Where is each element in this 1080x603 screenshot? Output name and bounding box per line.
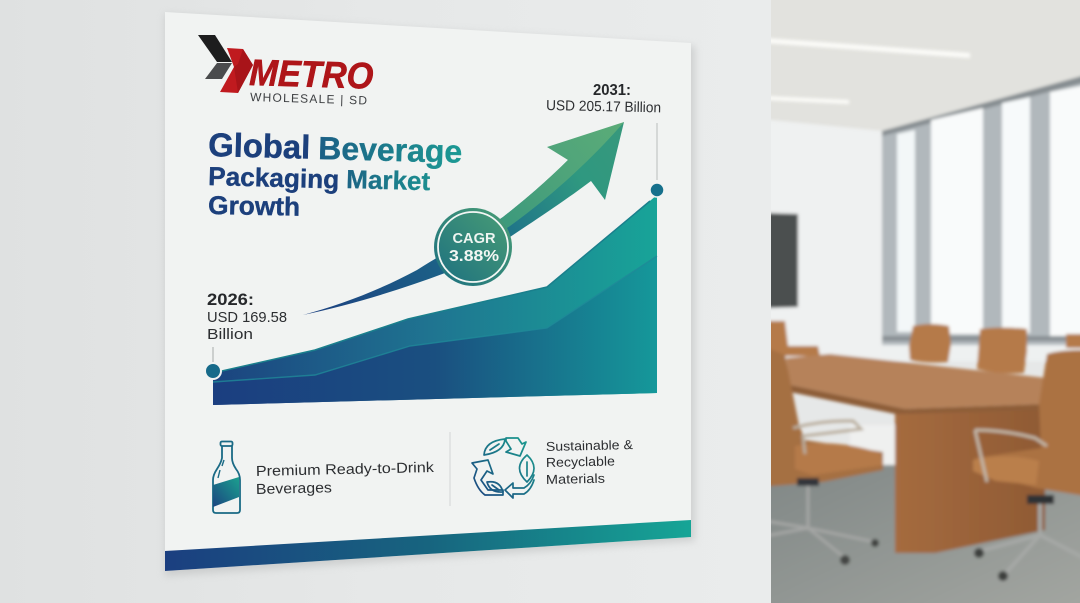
office room photo [760, 0, 1080, 603]
benefit: beverages [256, 460, 435, 498]
badge circle [434, 208, 512, 286]
poster [165, 12, 691, 571]
right chair [973, 350, 1080, 581]
divider [449, 432, 451, 506]
poster shadow [165, 14, 695, 576]
left chair [760, 345, 883, 565]
line 1: Sustainable & [546, 437, 633, 454]
back area top edge [213, 201, 650, 373]
leader line [212, 347, 214, 362]
side wall [760, 119, 882, 360]
wall screen [765, 213, 798, 308]
year: 2031: [593, 82, 631, 99]
value: USD 169.58 [207, 309, 287, 326]
title [208, 126, 463, 222]
title line 2: Packaging [208, 161, 340, 194]
poster panel [165, 12, 691, 571]
ceiling [760, 0, 1080, 131]
end point [650, 183, 664, 197]
benefit: sustainability [546, 437, 633, 487]
value: USD 205.17 Billion [546, 98, 661, 116]
area chart [213, 195, 657, 405]
2031 callout [546, 82, 664, 197]
title line 3: Growth [208, 190, 300, 222]
back area [213, 195, 657, 405]
year: 2026: [207, 290, 254, 309]
2026 callout [205, 290, 287, 379]
front area top edge [213, 256, 657, 382]
logo wordmark: METRO [249, 52, 374, 97]
icon: recycling leaves [472, 438, 534, 498]
line 2: Recyclable [546, 453, 615, 470]
floor [760, 455, 1080, 603]
table top [786, 354, 1047, 409]
icon: bottle [213, 442, 240, 513]
value unit: Billion [207, 326, 253, 343]
title line 1: Global [208, 126, 311, 166]
logo [198, 35, 374, 107]
ceiling lights [765, 38, 970, 104]
bottom gradient band [165, 520, 691, 571]
front area [213, 256, 657, 405]
back chairs [760, 321, 1080, 374]
line 1: Premium Ready-to-Drink [256, 460, 435, 480]
start point [205, 363, 221, 379]
growth arrow [303, 122, 624, 315]
badge ring [438, 212, 508, 282]
background wall [0, 0, 771, 603]
windows [882, 75, 1080, 361]
title line 1 accent: Beverage [318, 130, 463, 170]
arrow upper tone [490, 122, 624, 234]
CAGR badge [434, 208, 512, 286]
leader line [656, 123, 658, 180]
badge label: CAGR [452, 231, 496, 247]
table pedestal [895, 410, 1045, 553]
badge value: 3.88% [449, 248, 499, 265]
logo chevron [198, 35, 253, 93]
arrow lower tone [303, 122, 624, 315]
line 2: Beverages [256, 480, 332, 498]
logo subtitle: WHOLESALE | SD [250, 90, 368, 107]
line 3: Materials [546, 471, 606, 487]
title line 2 accent: Market [346, 164, 431, 196]
